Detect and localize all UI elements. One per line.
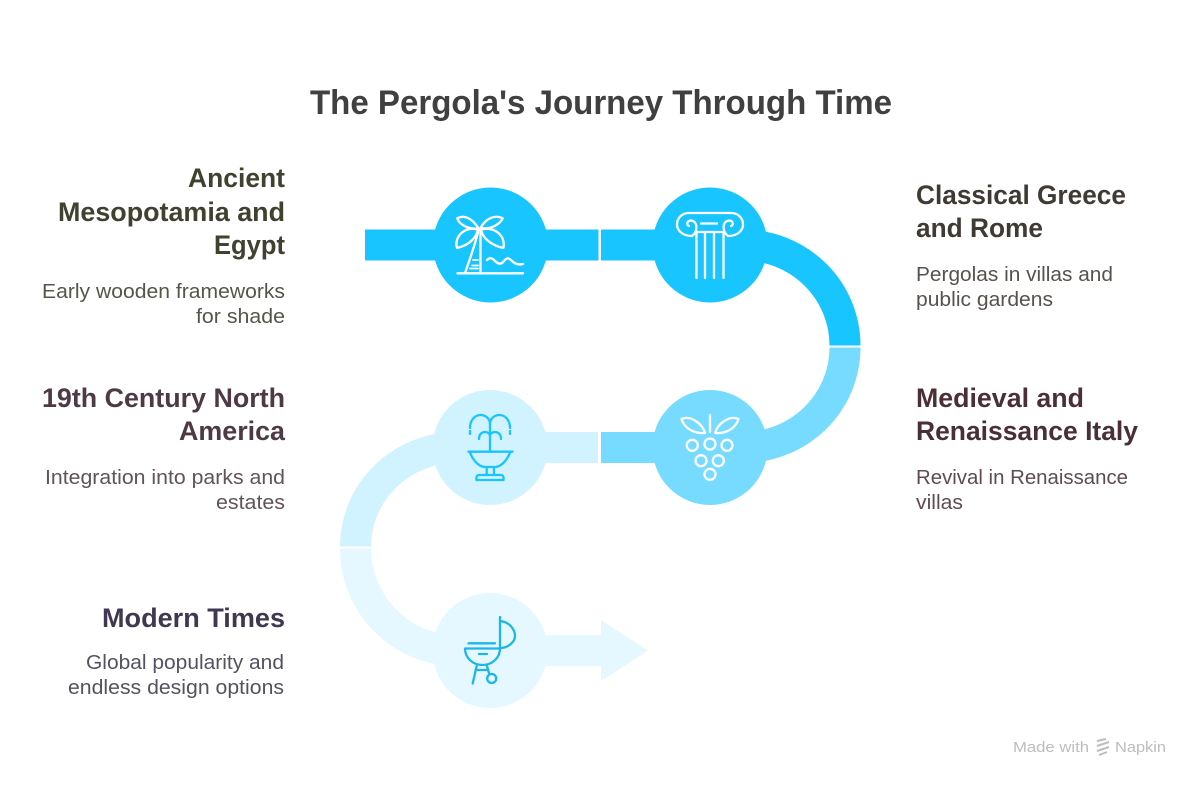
path segment 5 curve [356, 548, 602, 650]
path segment 2 [601, 245, 845, 346]
footer: Made with Napkin: Made with [1013, 739, 1089, 756]
icon: grapes [652, 390, 768, 505]
panel: Classical Greece and Rome text [916, 180, 1126, 311]
panel: Ancient Mesopotamia and Egypt text: for shade [196, 305, 285, 328]
path segment 3 [601, 348, 845, 448]
panel: Classical Greece and Rome text: Pergolas in villas and [916, 263, 1113, 286]
panel: 19th Century North America text: 19th Century North [42, 383, 285, 413]
panel: Classical Greece and Rome text: public gardens [916, 288, 1053, 311]
panel: 19th Century North America text [42, 383, 286, 514]
icon: fountain [432, 390, 548, 505]
footer: Made with Napkin: Napkin [1115, 739, 1166, 756]
panel: Modern Times text: Modern Times [102, 603, 285, 633]
icon: barbecue grill [432, 593, 548, 708]
panel: Ancient Mesopotamia and Egypt text: Egypt [214, 230, 285, 260]
icon: Napkin logo [1097, 739, 1109, 755]
panel: Ancient Mesopotamia and Egypt text: Mesopotamia and [58, 197, 285, 227]
panel: Medieval and Renaissance Italy text: Medieval and [916, 383, 1084, 413]
arrow head [601, 620, 648, 681]
panel: Ancient Mesopotamia and Egypt text [42, 163, 285, 328]
panel: Modern Times text [68, 603, 285, 699]
panel: Classical Greece and Rome text: Classical Greece [916, 180, 1126, 210]
path segment 1 [365, 230, 598, 260]
footer: Made with Napkin [1013, 739, 1166, 756]
panel: 19th Century North America text: Integration into parks and [45, 466, 285, 489]
panel: Medieval and Renaissance Italy text: Revival in Renaissance [916, 466, 1128, 489]
title: The Pergola's Journey Through Time [310, 84, 892, 122]
panel: winding path [356, 245, 845, 681]
panel: 19th Century North America text: America [179, 416, 286, 446]
panel: Classical Greece and Rome text: and Rome [916, 213, 1043, 243]
panel: Ancient Mesopotamia and Egypt text: Ancient [188, 163, 285, 193]
panel: Medieval and Renaissance Italy text: villas [916, 491, 963, 514]
icon: palm tree [433, 188, 548, 302]
panel: Medieval and Renaissance Italy text [916, 383, 1138, 514]
icon: ionic column [652, 188, 768, 302]
panel: Modern Times text: Global popularity and [86, 651, 284, 674]
panel: 19th Century North America text: estates [216, 491, 285, 514]
panel: Modern Times text: endless design options [68, 676, 284, 699]
panel: Ancient Mesopotamia and Egypt text: Early wooden frameworks [42, 280, 285, 303]
panel: Medieval and Renaissance Italy text: Renaissance Italy [916, 416, 1138, 446]
path segment 4 [356, 448, 598, 546]
